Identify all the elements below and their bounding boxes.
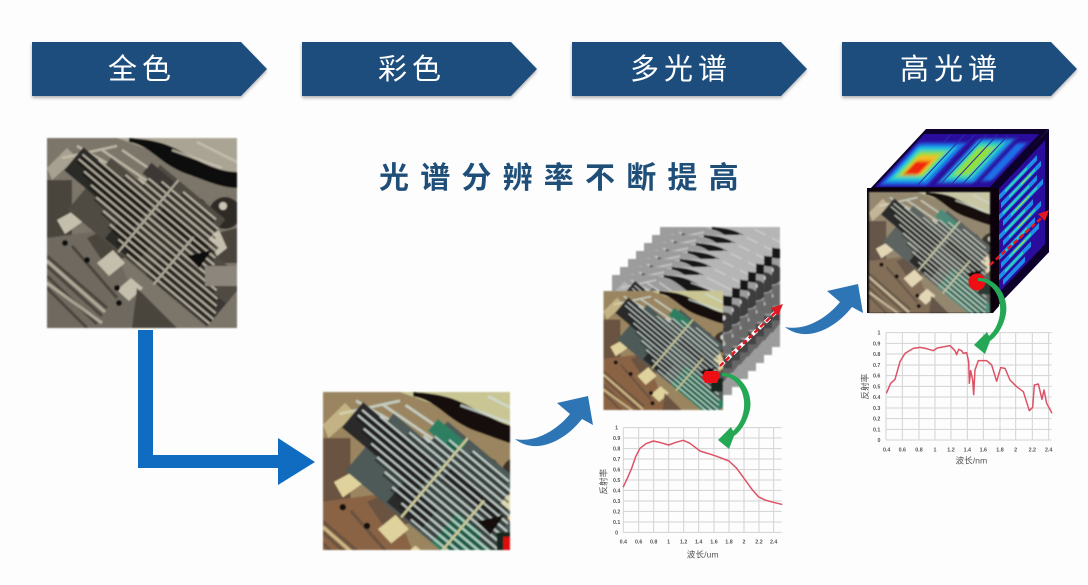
chart: hyperspectral reflectance: 1 [934,447,937,453]
chart: multispectral reflectance: 0.4 [620,540,627,546]
red spectrum axis: multispectral [720,304,783,366]
chart: multispectral reflectance: 0.8 [650,540,657,546]
header: 高光谱: 高光谱 [900,53,1002,86]
front colour image [602,290,724,412]
red spectrum axis: hyperspectral [990,210,1049,265]
chart: hyperspectral reflectance: 0.6 [873,374,880,380]
chart: multispectral reflectance: 0.9 [613,436,620,442]
green arrow: pixel to hyperspectral curve [974,278,1006,354]
header: 多光谱: 多光谱 [630,53,732,86]
header: 多光谱 [572,42,807,96]
front colour image [867,179,1021,324]
chart: hyperspectral reflectance: 1.6 [980,447,987,453]
chart: hyperspectral reflectance: 0.4 [883,447,890,453]
chart: hyperspectral reflectance [859,331,1052,465]
cube right face [991,129,1049,313]
chart: multispectral reflectance: 波长/um [687,549,719,560]
chart: hyperspectral reflectance: 0.2 [873,417,880,423]
chart: multispectral reflectance: 2.2 [755,540,763,546]
image: colour field photo [321,372,565,585]
chart: multispectral reflectance: 反射率 [598,468,609,495]
red pixel marker: multispectral [702,371,720,383]
chart: hyperspectral reflectance: 0.6 [899,447,906,453]
chart: multispectral reflectance: 0.5 [613,478,620,484]
chart: hyperspectral reflectance: 0.8 [873,352,880,358]
arrow: colour to multispectral [515,396,593,446]
header: 高光谱 [842,42,1077,96]
green arrow: pixel to multispectral curve [718,373,750,449]
chart: hyperspectral reflectance: 2 [1014,447,1017,453]
chart: multispectral reflectance: 1.2 [680,540,687,546]
chart: hyperspectral reflectance: 1.8 [996,447,1004,453]
chart: multispectral reflectance: 0.8 [613,447,620,453]
chart: multispectral reflectance: 1.8 [725,540,733,546]
hyperspectral data cube [867,129,1049,324]
chart: hyperspectral reflectance: 2.2 [1029,447,1036,453]
chart: hyperspectral reflectance: 0.5 [873,384,880,390]
header: 全色: 全色 [108,53,176,86]
header: 彩色: 彩色 [378,53,446,86]
chart: hyperspectral reflectance: 0.3 [873,406,880,412]
chart: multispectral reflectance: 0.4 [613,488,620,494]
image: panchromatic field photo [45,120,267,328]
chart: hyperspectral reflectance: 0 [878,438,881,444]
header: 彩色 [302,42,537,96]
chart: multispectral reflectance: 0 [615,530,618,536]
multispectral image stack [602,215,799,420]
chart: multispectral reflectance: 0.1 [613,520,620,526]
chart: multispectral reflectance: 1 [667,540,670,546]
chart: multispectral reflectance: 1.6 [710,540,718,546]
chart: multispectral reflectance [598,426,782,560]
chart: multispectral reflectance: 0.7 [613,457,620,463]
chart: multispectral reflectance: 0.2 [613,509,620,515]
arrow: multispectral to hyperspectral [785,284,863,334]
chart: multispectral reflectance: 2.4 [770,540,777,546]
chart: multispectral reflectance: 0.6 [613,468,620,474]
red pixel marker: hyperspectral [968,274,986,290]
chart: hyperspectral reflectance: 0.1 [873,427,880,433]
title: spectral resolution keeps improving: 光谱分辨率不断提高 [379,162,750,195]
chart: multispectral reflectance: 1 [615,426,618,432]
arrow: panchromatic to colour [138,330,315,485]
chart: hyperspectral reflectance: 1.4 [964,447,971,453]
chart: hyperspectral reflectance: 1.2 [947,447,955,453]
chart: hyperspectral reflectance: 0.7 [873,363,880,369]
chart: multispectral reflectance: 2 [743,540,746,546]
header: 全色 [32,42,267,96]
cube front frame [867,188,999,313]
chart: multispectral reflectance: 0.6 [635,540,642,546]
chart: hyperspectral reflectance: 1 [878,331,881,337]
chart: hyperspectral reflectance: 0.9 [873,341,880,347]
chart: hyperspectral reflectance: 0.8 [915,447,923,453]
chart: hyperspectral reflectance: 反射率 [859,373,870,400]
chart: hyperspectral reflectance: 0.4 [873,395,880,401]
gray spectral slices [611,215,799,395]
chart: multispectral reflectance: 1.4 [695,540,702,546]
chart: hyperspectral reflectance: 2.4 [1045,447,1052,453]
chart: hyperspectral reflectance: 波长/nm [955,454,987,465]
cube top face [869,129,1049,190]
chart: multispectral reflectance: 0.3 [613,499,620,505]
